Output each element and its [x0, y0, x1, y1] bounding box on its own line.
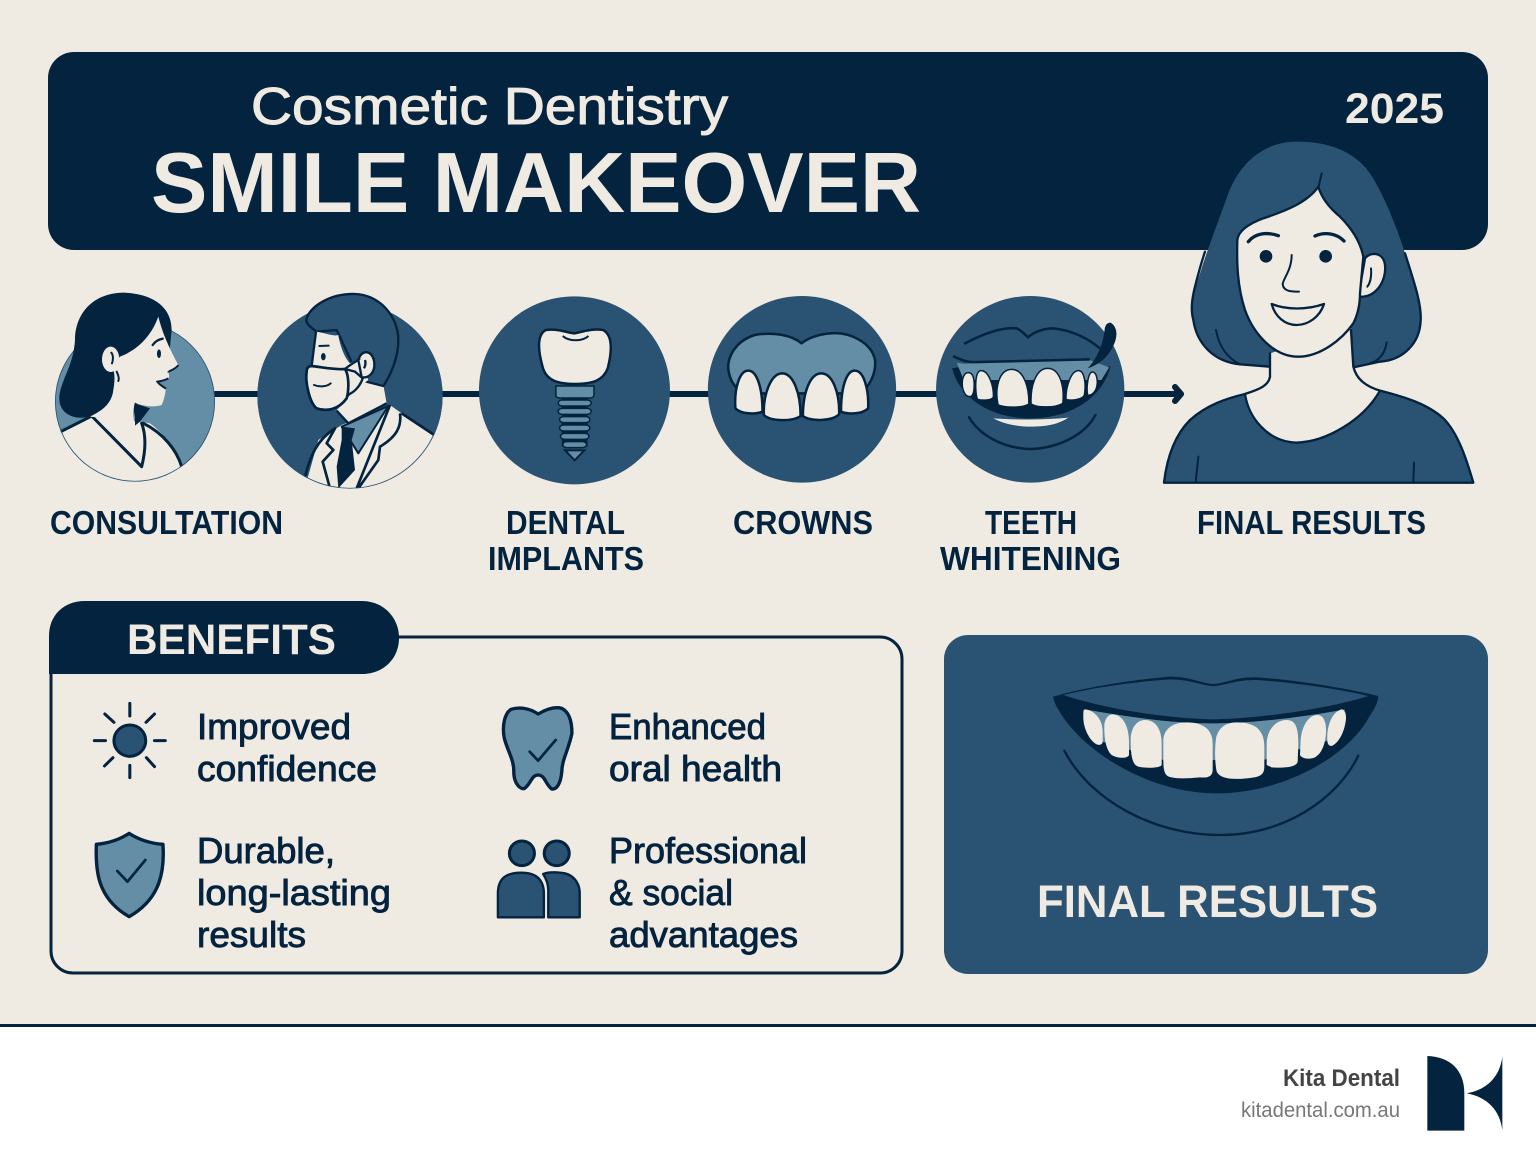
benefit: durable results: Durable, [197, 830, 335, 871]
panel: final results smile [944, 635, 1488, 974]
benefit: professional and social advantages: & social [609, 872, 733, 913]
icon: shield with check [96, 833, 163, 917]
benefits heading tab [49, 601, 399, 674]
benefit: durable results: results [197, 914, 306, 955]
icon: two people [498, 841, 580, 917]
benefit: durable results: long-lasting [197, 872, 391, 913]
label: teeth whitening [940, 504, 1121, 577]
icon: teeth whitening [936, 296, 1124, 483]
icon: patient consultation [55, 293, 215, 493]
benefit: improved confidence: confidence [197, 748, 377, 789]
label: consultation: CONSULTATION [50, 504, 283, 541]
timeline connector arrow [215, 387, 1181, 401]
subtitle: Cosmetic Dentistry [251, 78, 728, 136]
main title: SMILE MAKEOVER [151, 136, 921, 231]
label: dental implants: IMPLANTS [488, 540, 644, 577]
header banner [48, 52, 1488, 250]
benefit: improved confidence: Improved [197, 706, 351, 747]
label: dental implants [488, 504, 644, 577]
icon: tooth with check [503, 708, 572, 789]
panel: benefits [49, 601, 902, 973]
illustration: smiling woman final result [1164, 142, 1473, 483]
icon: crowns [708, 296, 896, 483]
benefit: durable results [197, 830, 391, 955]
benefit: enhanced oral health: Enhanced [609, 706, 766, 747]
final results caption: FINAL RESULTS [1037, 876, 1378, 927]
benefit: enhanced oral health: oral health [609, 748, 782, 789]
label: final results: FINAL RESULTS [1197, 504, 1426, 541]
benefit: professional and social advantages: Professional [609, 830, 807, 871]
icon: dentist with mask [257, 294, 443, 493]
benefits heading tab: BENEFITS [127, 616, 336, 664]
label: teeth whitening: WHITENING [940, 540, 1121, 577]
label: dental implants: DENTAL [506, 504, 625, 541]
footer website: kitadental.com.au [1241, 1099, 1400, 1122]
year: 2025 [1345, 85, 1444, 133]
footer brand name: Kita Dental [1283, 1065, 1400, 1092]
illustration: smile [1053, 677, 1378, 835]
label: crowns: CROWNS [733, 504, 873, 541]
benefit: enhanced oral health [609, 706, 782, 789]
benefit: professional and social advantages [609, 830, 807, 955]
label: teeth whitening: TEETH [985, 504, 1077, 541]
benefit: improved confidence [197, 706, 377, 789]
icon: sun [94, 703, 165, 778]
logo [1427, 1056, 1502, 1131]
footer [0, 1024, 1536, 1154]
icon: dental implant [479, 296, 670, 484]
benefit: professional and social advantages: advantages [609, 914, 798, 955]
